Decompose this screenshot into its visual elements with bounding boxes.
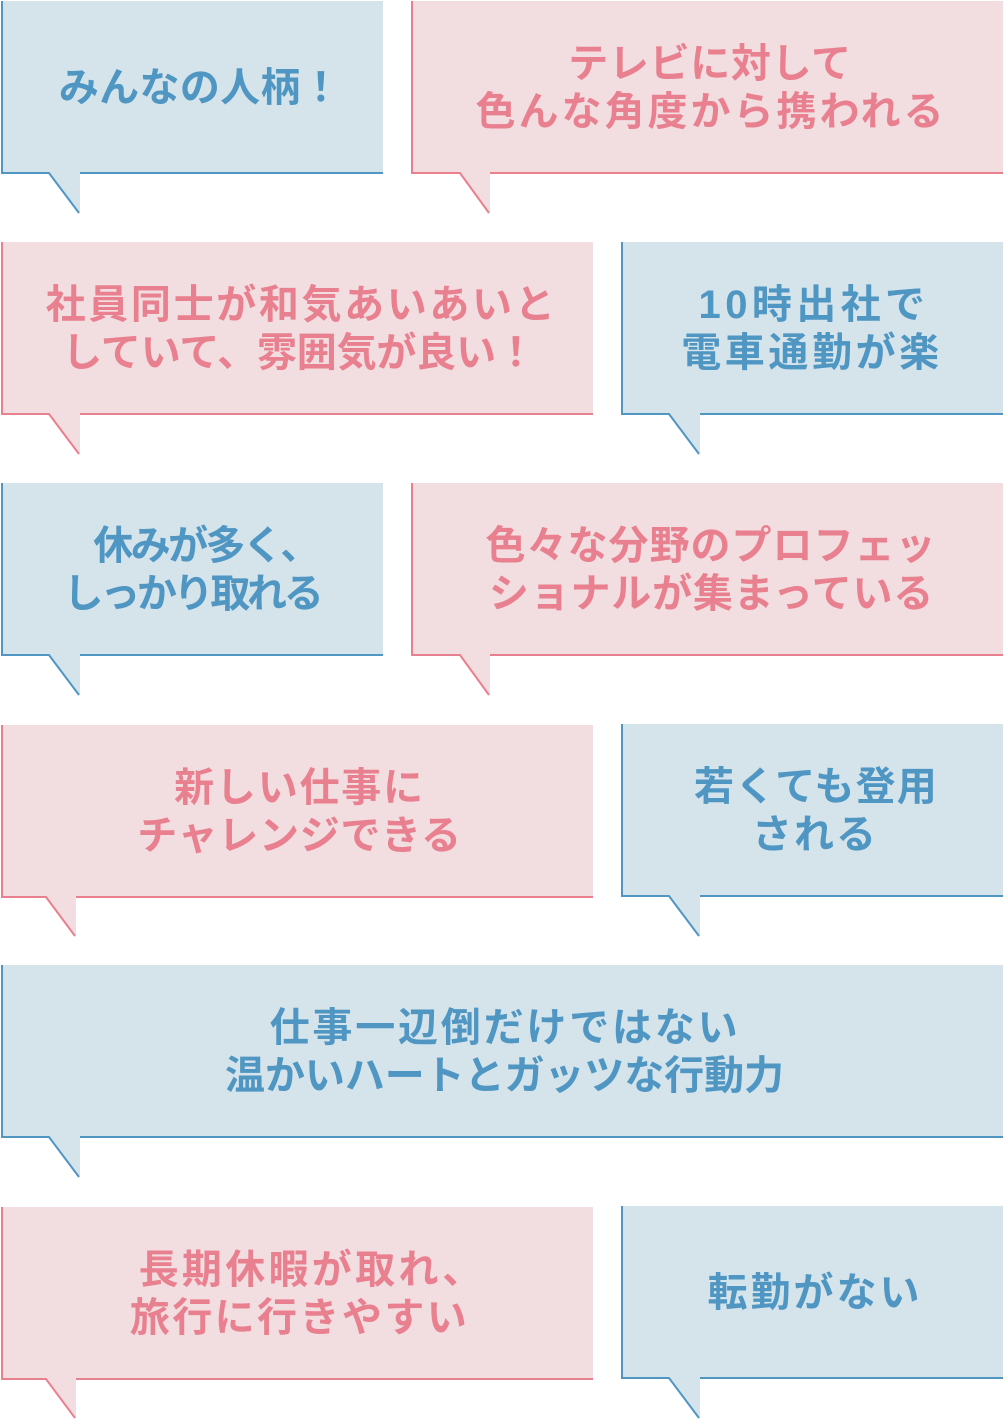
speech bubble: 休みが多く、しっかり取れる — [2, 483, 383, 695]
speech bubble: 社員同士が和気あいあいとしていて、雰囲気が良い！: 社員同士が和気あいあいと — [46, 283, 557, 327]
speech bubble: 仕事一辺倒だけではない温かいハートとガッツな行動力: 仕事一辺倒だけではない — [270, 1006, 740, 1050]
speech bubble: 長期休暇が取れ、旅行に行きやすい: 旅行に行きやすい — [130, 1296, 469, 1340]
speech bubble: テレビに対して色んな角度から携われる — [412, 1, 1003, 213]
speech bubble: 休みが多く、しっかり取れる: 休みが多く、 — [93, 524, 318, 568]
speech bubble: みんなの人柄！: みんなの人柄！ — [59, 66, 341, 110]
speech bubble: 新しい仕事にチャレンジできる — [2, 725, 593, 936]
speech bubble: 仕事一辺倒だけではない温かいハートとガッツな行動力: 温かいハートとガッツな行動力 — [225, 1054, 784, 1098]
speech bubble: 社員同士が和気あいあいとしていて、雰囲気が良い！ — [2, 242, 593, 454]
speech bubble: 色々な分野のプロフェッショナルが集まっている — [412, 483, 1003, 695]
speech bubble: 10時出社で電車通勤が楽: 10時出社で — [699, 283, 929, 327]
speech bubble: 休みが多く、しっかり取れる: しっかり取れる — [64, 572, 320, 616]
speech bubble: 転勤がない — [622, 1206, 1003, 1418]
speech bubble: 色々な分野のプロフェッショナルが集まっている: 色々な分野のプロフェッ — [486, 524, 936, 568]
speech bubble: 長期休暇が取れ、旅行に行きやすい: 長期休暇が取れ、 — [139, 1248, 485, 1292]
speech bubble: みんなの人柄！ — [2, 1, 383, 213]
speech bubble: 長期休暇が取れ、旅行に行きやすい — [2, 1207, 593, 1418]
speech bubble: 新しい仕事にチャレンジできる: チャレンジできる — [137, 814, 462, 858]
speech bubble: 転勤がない: 転勤がない — [708, 1271, 922, 1315]
speech bubble: 若くても登用される: 若くても登用 — [694, 765, 938, 809]
speech bubble: 色々な分野のプロフェッショナルが集まっている: ショナルが集まっている — [489, 572, 934, 616]
speech bubble: テレビに対して色んな角度から携われる: テレビに対して — [568, 42, 852, 86]
speech bubble: 10時出社で電車通勤が楽 — [622, 242, 1003, 454]
speech bubble: 若くても登用される — [622, 724, 1003, 936]
speech bubble: 新しい仕事にチャレンジできる: 新しい仕事に — [174, 766, 425, 810]
speech bubble: テレビに対して色んな角度から携われる: 色んな角度から携われる — [476, 90, 946, 134]
speech bubble: 若くても登用される: される — [752, 813, 878, 857]
speech bubble: 10時出社で電車通勤が楽: 電車通勤が楽 — [681, 331, 943, 375]
speech bubble: 仕事一辺倒だけではない温かいハートとガッツな行動力 — [2, 965, 1003, 1177]
speech bubble: 社員同士が和気あいあいとしていて、雰囲気が良い！: していて、雰囲気が良い！ — [62, 331, 536, 375]
